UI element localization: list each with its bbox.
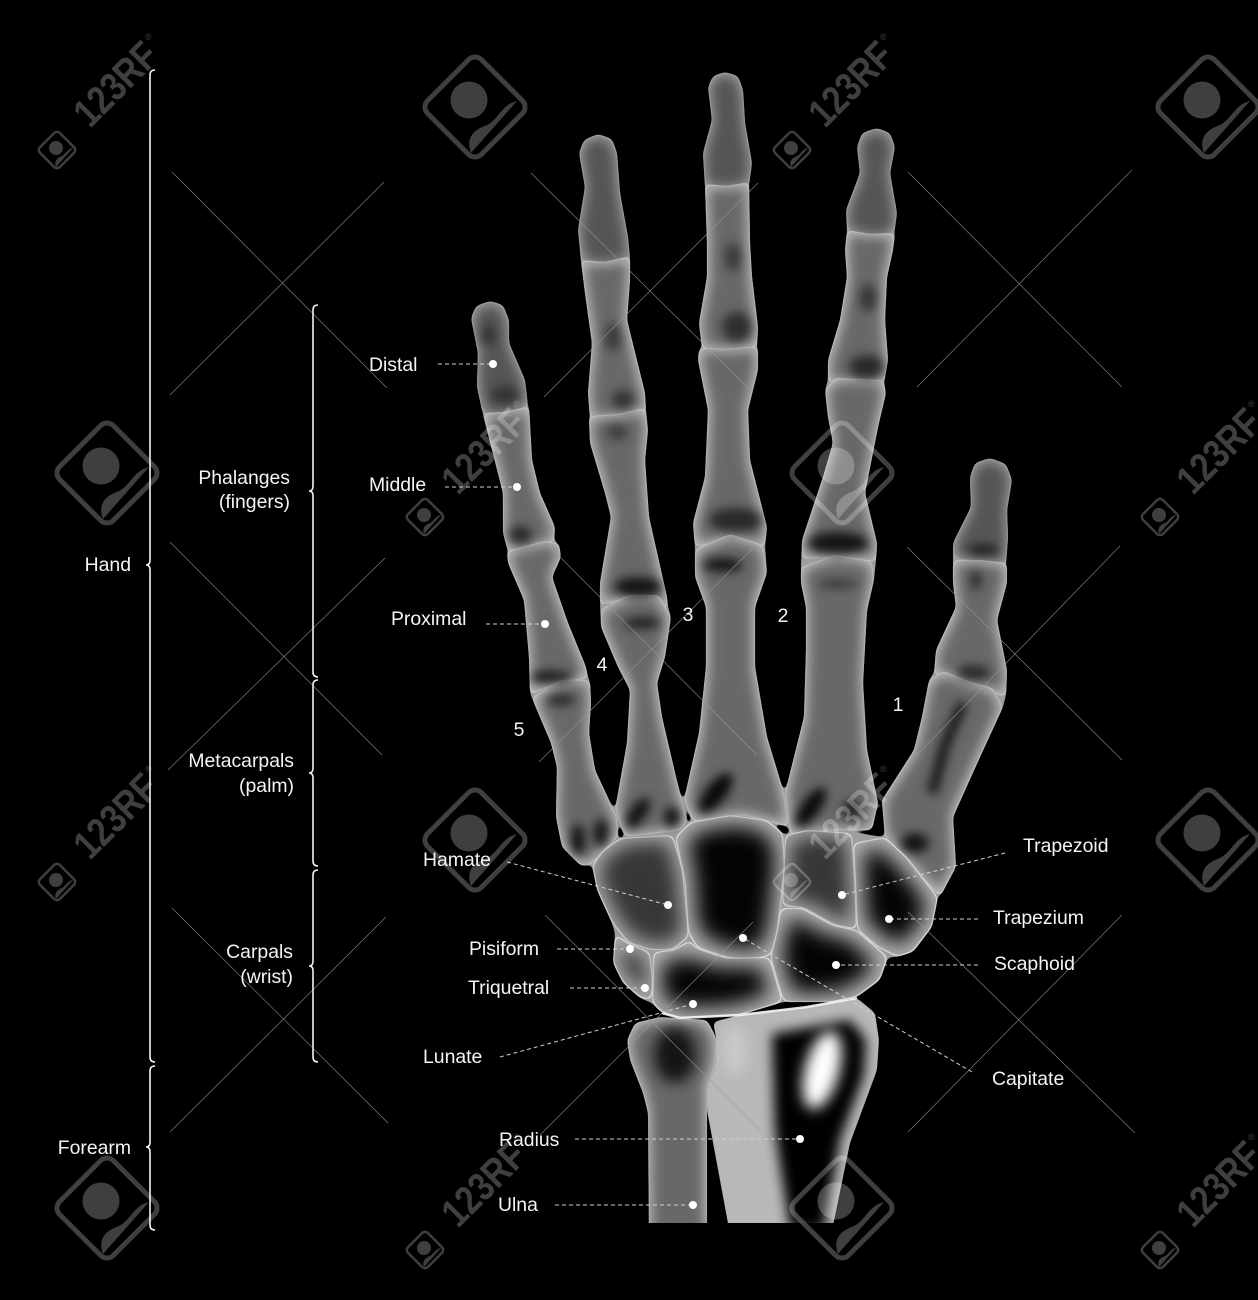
watermark: 123RF logotypes: 123RF	[65, 34, 167, 135]
watermark: 123RF logotypes: 123RF	[433, 401, 535, 502]
callout: Trapezium	[885, 907, 1084, 929]
bones: middle finger (3)	[684, 72, 789, 827]
carpal: capitate	[675, 815, 785, 960]
bracket: forearm	[146, 1066, 155, 1230]
callout: Capitate	[739, 934, 1064, 1090]
callout: Trapezoid: Trapezoid	[1023, 835, 1109, 857]
finger numbers: 2	[778, 605, 788, 627]
watermark: 123RF logotypes: 123RF	[800, 766, 902, 867]
carpal: trapezoid	[782, 830, 857, 930]
carpal: pisiform	[613, 933, 653, 1000]
finger and carpal silhouette backing	[471, 72, 1012, 1018]
watermark: 123RF logotypes: ®	[145, 764, 152, 774]
label: Metacarpals (palm): Metacarpals	[188, 750, 294, 772]
callout: Trapezoid	[838, 835, 1109, 899]
callout: Proximal: Proximal	[391, 608, 466, 630]
callout: Capitate: Capitate	[992, 1068, 1064, 1090]
callout: Hamate	[423, 849, 672, 909]
label: Hand: Hand	[85, 554, 131, 576]
callout: Scaphoid: Scaphoid	[994, 953, 1075, 975]
hand skeleton	[471, 72, 1012, 1245]
callout: Hamate: Hamate	[423, 849, 491, 871]
watermark: 123RF logotypes: ®	[145, 32, 152, 42]
finger numbers: 3	[683, 604, 693, 626]
watermark: 123RF logotypes: ®	[1248, 1132, 1255, 1142]
callout: Scaphoid	[832, 953, 1075, 975]
bones: radius	[707, 998, 879, 1245]
bones: ulna	[627, 1017, 716, 1245]
finger numbers: 4	[597, 654, 608, 676]
label: Metacarpals (palm): (palm)	[239, 775, 294, 797]
bracket: phalanges	[309, 305, 318, 677]
carpal: lunate and triquetral	[652, 940, 783, 1018]
watermark: 123RF logotypes: ®	[880, 32, 887, 42]
callout: Distal: Distal	[369, 354, 418, 376]
bracket: hand	[146, 70, 155, 1062]
callout: Ulna	[498, 1194, 697, 1216]
bones: little finger (5)	[471, 301, 618, 866]
watermark: 123RF logotypes: 123RF	[800, 34, 902, 135]
watermark: 123RF logotypes: ®	[513, 1132, 520, 1142]
callout: Pisiform	[469, 938, 634, 960]
bones: ring finger (4)	[578, 134, 687, 837]
callout: Middle	[369, 474, 521, 496]
label: Carpals (wrist): Carpals	[226, 941, 293, 963]
thin diagonal cross lines	[168, 170, 1135, 1135]
carpal: trapezium	[853, 837, 938, 957]
callout: Distal	[369, 354, 497, 376]
watermark: 123RF logotypes: ®	[513, 399, 520, 409]
watermark: 123RF logotypes: 123RF	[433, 1134, 535, 1235]
watermark: 123RF logotypes: 123RF	[65, 766, 167, 867]
callout: Proximal	[391, 608, 549, 630]
finger numbers: 5	[514, 719, 524, 741]
bright wrist joint highlight	[662, 998, 857, 1018]
finger numbers: 1	[893, 694, 903, 716]
label: Phalanges (fingers): Phalanges	[198, 467, 290, 489]
callout: Triquetral	[468, 977, 649, 999]
callout: Middle: Middle	[369, 474, 426, 496]
callout: Lunate	[423, 1000, 697, 1068]
callout: Radius	[499, 1129, 804, 1151]
carpal: scaphoid	[770, 908, 888, 1002]
label: Carpals (wrist): (wrist)	[240, 966, 293, 988]
callout: Ulna: Ulna	[498, 1194, 538, 1216]
bones: carpals	[592, 815, 938, 1018]
callout: Triquetral: Triquetral	[468, 977, 549, 999]
callout: Radius: Radius	[499, 1129, 559, 1151]
watermark: 123RF logotypes: ®	[880, 764, 887, 774]
watermark: 123RF logotypes: ®	[1248, 399, 1255, 409]
carpal: hamate	[592, 835, 689, 950]
callout: Lunate: Lunate	[423, 1046, 482, 1068]
label: Phalanges (fingers): (fingers)	[219, 491, 290, 513]
bones: thumb (1)	[882, 458, 1012, 897]
label: Forearm: Forearm	[58, 1137, 131, 1159]
callout: Trapezium: Trapezium	[993, 907, 1084, 929]
bones: index finger (2)	[785, 128, 897, 835]
bracket: metacarpals	[309, 680, 318, 866]
finger numbers	[514, 604, 903, 741]
callout: Pisiform: Pisiform	[469, 938, 539, 960]
bone shading: dark blotches in joints and bases	[480, 243, 999, 856]
bracket: carpals	[309, 870, 318, 1062]
